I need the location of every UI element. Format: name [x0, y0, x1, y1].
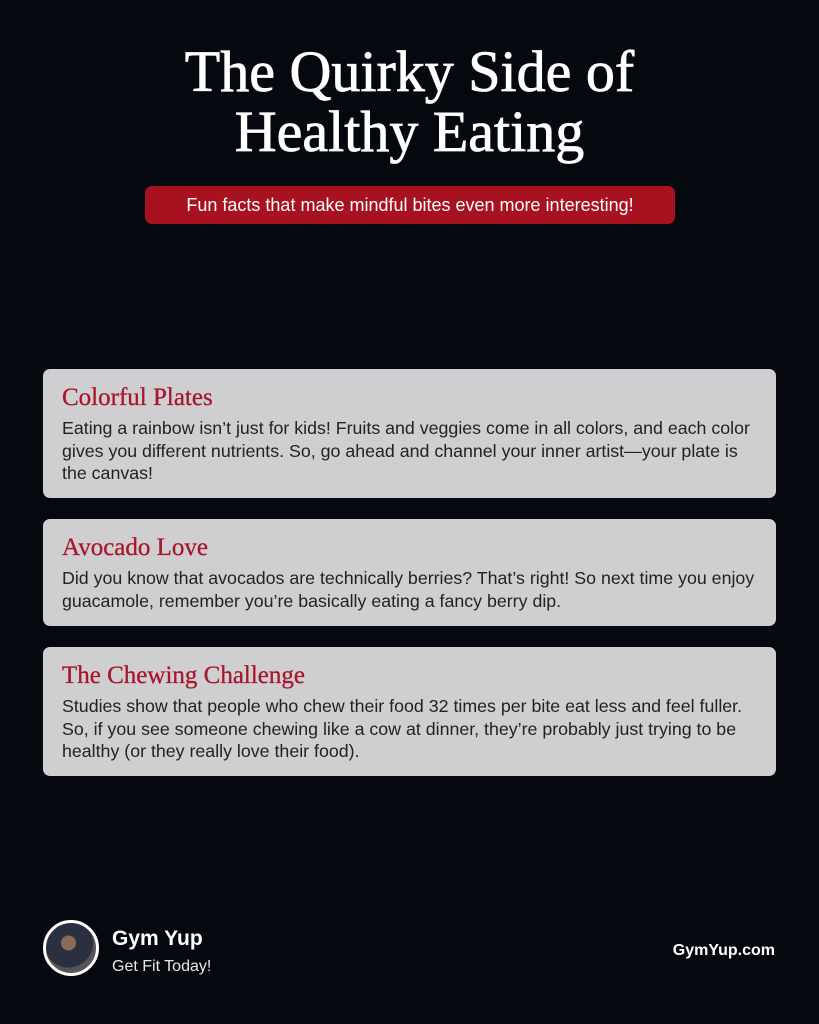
text block: Did you know that avocados are technically berries? That’s right! So next time you enjoy [62, 568, 754, 588]
title: The Quirky Side of [185, 39, 634, 104]
icon: avatar [43, 920, 99, 976]
heading: The Chewing Challenge [62, 662, 305, 689]
brand name: Gym Yup [112, 927, 203, 950]
text block: Eating a rainbow isn’t just for kids! Fruits and veggies come in all colors, and each color [62, 418, 750, 438]
subtitle banner [145, 186, 675, 224]
text block: the canvas! [62, 463, 153, 483]
heading: Colorful Plates [62, 384, 213, 411]
text block: So, if you see someone chewing like a cow at dinner, they’re probably just trying to be [62, 718, 736, 738]
text block: healthy (or they really love their food). [62, 741, 360, 761]
title [185, 39, 635, 164]
text block [62, 696, 742, 761]
panel: chewing challenge [43, 647, 776, 776]
subtitle banner: Fun facts that make mindful bites even more interesting! [186, 195, 634, 215]
text block [62, 418, 750, 483]
panel: colorful plates [43, 369, 776, 498]
text block: gives you different nutrients. So, go ahead and channel your inner artist—your plate is [62, 440, 738, 460]
text block [62, 568, 754, 610]
heading: Avocado Love [62, 534, 208, 561]
text block: Studies show that people who chew their food 32 times per bite eat less and feel fuller. [62, 696, 742, 716]
website: GymYup.com [673, 942, 775, 959]
text block: guacamole, remember you’re basically eating a fancy berry dip. [62, 590, 561, 610]
title: Healthy Eating [235, 99, 584, 164]
tagline: Get Fit Today! [112, 958, 211, 975]
panel: avocado love [43, 519, 776, 626]
